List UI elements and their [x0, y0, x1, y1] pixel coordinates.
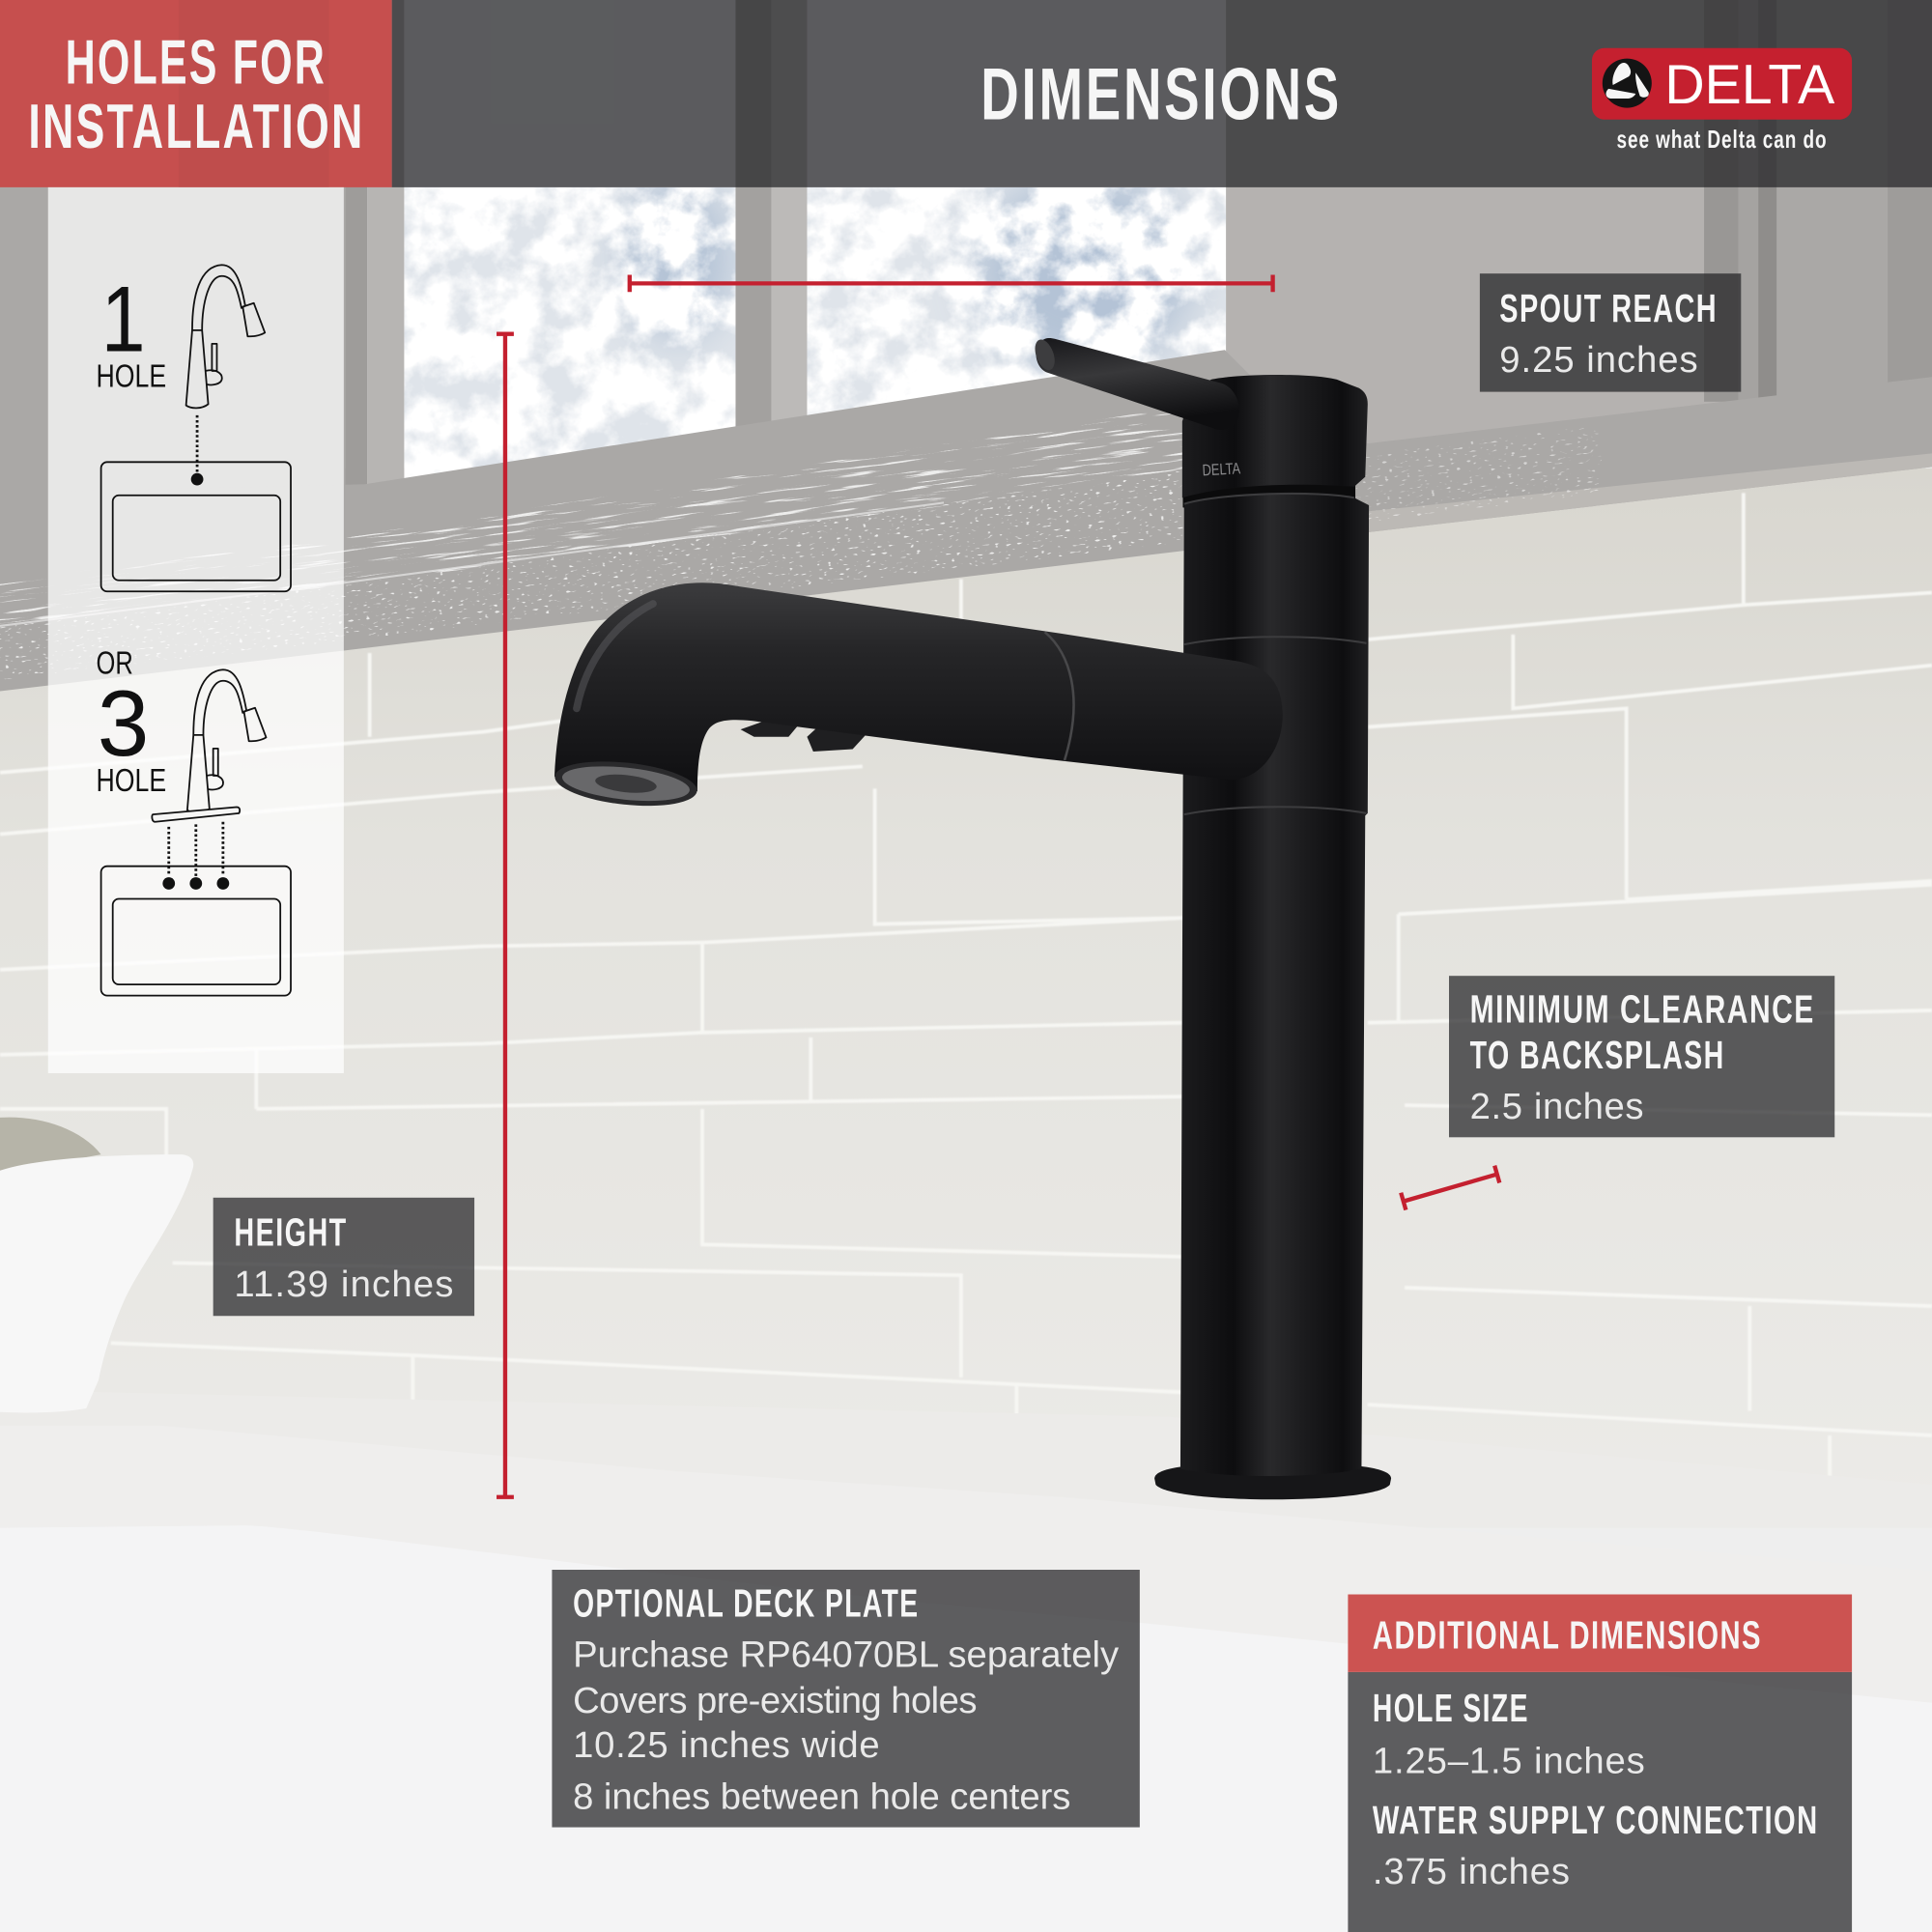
panel heading: ADDITIONAL DIMENSIONS	[1373, 1613, 1762, 1658]
numeral 3: 3	[98, 670, 149, 776]
dotted guide	[196, 415, 198, 473]
arrow: clearance dimension	[1401, 1166, 1499, 1210]
heading: holes for: HOLES FOR	[66, 27, 327, 98]
window frame right	[1226, 0, 1932, 458]
hole size: 1.25–1.5 inches	[1373, 1740, 1645, 1781]
spray buttons	[741, 715, 867, 752]
spout seam	[1045, 632, 1073, 760]
icon: sink	[101, 462, 291, 591]
callout: height: 11.39 inches	[234, 1264, 453, 1305]
bowl	[0, 1118, 193, 1412]
faucet column	[1180, 494, 1369, 1476]
water supply connection	[1373, 1798, 1819, 1892]
dotted guides	[169, 822, 223, 876]
label: hole: HOLE	[96, 763, 166, 799]
faucet handle body	[1182, 375, 1368, 497]
background: kitchen scene photo	[0, 0, 1932, 1431]
panel heading	[1348, 1595, 1852, 1672]
callout: optional deck plate: 8 inches between hole centers	[573, 1776, 1070, 1817]
sill bevel right	[1368, 453, 1932, 532]
callout: spout reach: 9.25 inches	[1499, 339, 1698, 381]
sill wood grain	[0, 413, 1602, 680]
callout: minimum clearance: TO BACKSPLASH	[1470, 1033, 1725, 1077]
numeral 1: 1	[101, 267, 146, 372]
icon: faucet	[186, 265, 265, 408]
title: DIMENSIONS	[980, 54, 1342, 136]
mounting holes	[162, 877, 229, 890]
window glass with sky	[404, 173, 1226, 483]
logo mark	[1603, 59, 1652, 108]
wall tiles	[0, 469, 1932, 1528]
faucet lever	[1032, 337, 1239, 430]
logo badge	[1592, 48, 1852, 120]
hole size: HOLE SIZE	[1373, 1686, 1529, 1730]
callout: height: HEIGHT	[234, 1210, 348, 1255]
hole size	[1373, 1686, 1645, 1781]
callout: height	[213, 1198, 474, 1316]
callout: optional deck plate: 10.25 inches wide	[573, 1724, 880, 1766]
callout: minimum clearance	[1449, 976, 1834, 1137]
mounting hole	[191, 473, 203, 486]
panel: additional dimensions	[1348, 1595, 1852, 1932]
countertop reflection	[0, 1390, 1932, 1528]
callout: optional deck plate: Purchase RP64070BL separately	[573, 1634, 1120, 1676]
label: or: OR	[96, 646, 133, 682]
countertop	[0, 1426, 1932, 1932]
header bar	[392, 0, 1932, 187]
icon: sink	[101, 867, 291, 996]
arrow: spout reach dimension	[630, 274, 1273, 292]
head gap	[1182, 474, 1355, 508]
callout: optional deck plate	[552, 1570, 1140, 1828]
callout: minimum clearance: 2.5 inches	[1470, 1086, 1644, 1127]
panel: holes for installation	[48, 187, 344, 1073]
callout: minimum clearance: MINIMUM CLEARANCE	[1470, 987, 1815, 1032]
window mullion	[735, 0, 807, 443]
logo: Delta	[1592, 48, 1852, 154]
sprayer face	[553, 755, 699, 812]
faucet spout	[554, 582, 1283, 803]
callout: spout reach	[1480, 273, 1741, 392]
window sill	[0, 350, 1932, 692]
arrow: height dimension	[497, 334, 514, 1497]
water supply connection: .375 inches	[1373, 1851, 1570, 1892]
sky behind header	[404, 0, 1226, 187]
heading: installation: INSTALLATION	[28, 91, 365, 161]
tagline: see what Delta can do	[1616, 127, 1828, 154]
sink front	[0, 1525, 1932, 1932]
column joints	[1184, 494, 1367, 814]
three hole option	[96, 646, 291, 996]
faucet photo	[553, 337, 1391, 1499]
icon: faucet with deck plate	[152, 669, 267, 822]
logo wordmark: DELTA	[1664, 54, 1835, 116]
spout highlight	[577, 604, 653, 708]
tile joints	[0, 493, 1932, 1497]
callout: optional deck plate: OPTIONAL DECK PLATE	[573, 1580, 920, 1625]
label: hole: HOLE	[96, 359, 166, 395]
one hole option	[96, 265, 291, 591]
callout: spout reach: SPOUT REACH	[1499, 286, 1718, 330]
callout: optional deck plate: Covers pre-existing holes	[573, 1680, 977, 1721]
faucet base flange	[1154, 1463, 1391, 1499]
engraved brand: DELTA	[1202, 459, 1241, 479]
red heading block: holes for installation	[0, 0, 392, 187]
window frame left	[0, 0, 404, 554]
